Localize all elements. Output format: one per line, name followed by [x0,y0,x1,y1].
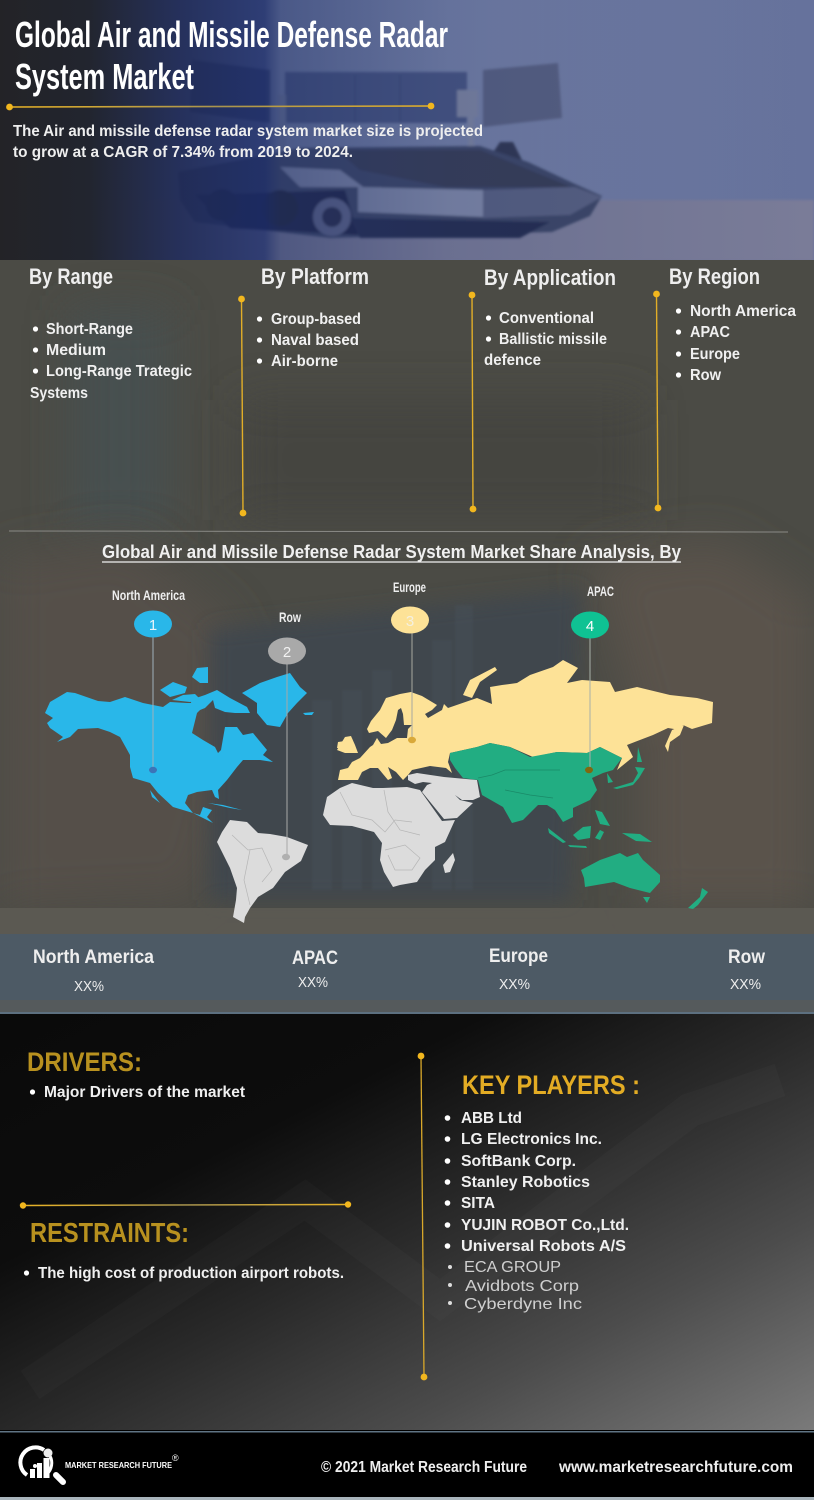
pin 4: APAC: APAC [587,583,614,599]
panel: By Region: Row [690,367,722,384]
logo wordmark: MARKET RESEARCH FUTURE [65,1461,173,1470]
key players list: YUJIN ROBOT Co.,Ltd. [461,1217,629,1234]
panel: header with radar vehicle [0,0,814,261]
intro text: to grow at a CAGR of 7.34% from 2019 to 2024. [13,144,353,161]
image: radar vehicle [178,60,602,238]
heading: Restraints: RESTRAINTS: [30,1217,189,1248]
stat: North America: XX% [74,978,104,995]
stat: Row: Row [728,947,765,968]
logo wordmark: ® [172,1453,179,1463]
background: blurred hands and chart image [0,310,814,935]
panel: By Platform: Naval based [271,332,359,349]
panel: By Range: Systems [30,385,88,402]
key players list: Universal Robots A/S [461,1238,626,1255]
panel: By Range: By Range [29,264,113,289]
panel: By Region: By Region [669,264,760,289]
stat: North America: North America [33,947,154,968]
pin 3: Europe: Europe [393,579,426,595]
horizontal connector [20,1201,351,1209]
panel: regional share band [0,934,814,1012]
region: South America, Africa and Middle East [217,773,480,923]
world map [45,660,713,923]
region: Europe and Russia [337,660,713,780]
heading: Drivers: DRIVERS: [27,1047,142,1077]
panel: segmentation and map background [0,260,814,935]
heading: Key Players: KEY PLAYERS : [462,1070,640,1100]
vertical connector 3 [653,291,661,511]
pin 4: APAC: 4 [586,618,594,635]
panel: By Range: Short-Range [46,321,133,338]
panel: By Region: Europe [690,346,740,363]
panel: By Platform: Air-borne [271,353,338,370]
panel: drivers, restraints and key players [0,1012,814,1430]
key players list [445,1110,629,1313]
key players list: Stanley Robotics [461,1174,590,1191]
stat: Row [728,947,765,993]
logo: magnifier with bars [20,1447,63,1482]
key players list: SITA [461,1195,495,1212]
panel: By Application: Conventional [499,310,594,327]
stat: Row: XX% [730,976,761,993]
title: System Market [15,56,194,97]
title: Global Air and Missile Defense Radar [15,14,448,55]
panel: By Range: Medium [46,342,106,359]
pin 3: Europe: 3 [406,613,414,630]
panel: By Platform [257,264,369,370]
title divider with end dots [6,103,434,110]
panel: By Region [669,264,796,384]
restraints list: The high cost of production airport robots. [38,1265,344,1282]
key players list: LG Electronics Inc. [461,1131,602,1148]
pin 2: Row: 2 [283,644,291,661]
stat: Europe [489,946,548,993]
key players list: ECA GROUP [464,1259,561,1276]
vertical connector [418,1053,427,1380]
key players list: Avidbots Corp [465,1278,579,1295]
key players list: Cyberdyne Inc [464,1296,582,1313]
vertical connector 2 [469,292,476,512]
website: www.marketresearchfuture.com [558,1459,793,1476]
panel: By Platform: By Platform [261,264,369,289]
panel: By Application [484,265,616,369]
panel: By Region: North America [690,303,796,320]
intro text [13,123,483,161]
region: North America [45,667,314,823]
panel: footer [0,1430,814,1500]
key players list: SoftBank Corp. [461,1153,576,1170]
title [15,14,448,97]
pin 1: North America: 1 [149,617,157,634]
logo wordmark [65,1453,179,1470]
panel: By Application: By Application [484,265,616,290]
stat: North America [33,947,154,995]
stat: APAC: APAC [292,948,338,969]
pin 3: Europe [391,579,429,743]
pin 2: Row [268,609,306,860]
stat: Europe: Europe [489,946,548,967]
stat: APAC [292,948,338,991]
key players list: ABB Ltd [461,1110,522,1127]
panel: By Range: Long-Range Trategic [46,363,192,380]
pin 1: North America [112,587,185,773]
pin 4: APAC [571,583,614,773]
vertical connector 1 [238,296,246,516]
panel: By Region: APAC [690,324,730,341]
panel: By Range [29,264,192,402]
pin 2: Row: Row [279,609,301,625]
region: Asia Pacific [450,743,708,909]
drivers list: Major Drivers of the market [44,1084,246,1101]
panel: By Application: defence [484,352,541,369]
copyright: © 2021 Market Research Future [321,1459,527,1476]
pin 1: North America: North America [112,587,185,603]
intro text: The Air and missile defense radar system market size is projected [13,123,483,140]
stat: APAC: XX% [298,974,328,991]
panel: By Application: Ballistic missile [499,331,607,348]
map heading: Global Air and Missile Defense Radar System Market Share Analysis, By [102,542,681,562]
panel: By Platform: Group-based [271,311,361,328]
stat: Europe: XX% [499,976,530,993]
